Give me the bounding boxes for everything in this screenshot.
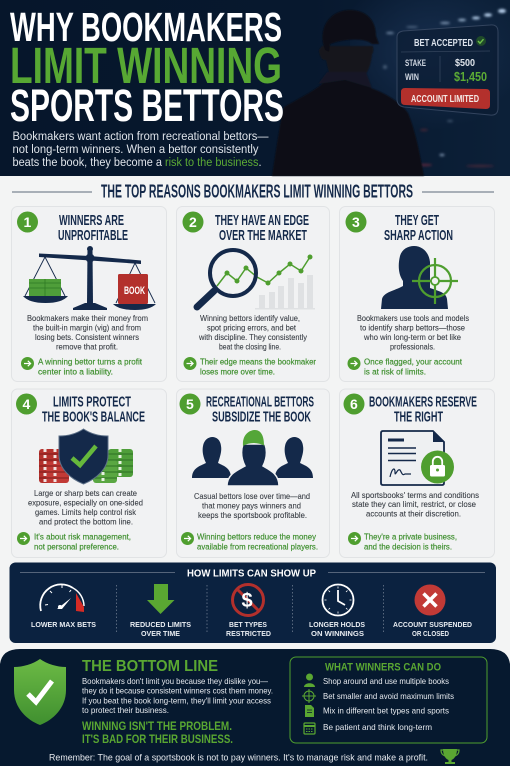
item: reduced limits: OVER TIME xyxy=(141,629,180,638)
icon: magnifier over chart xyxy=(197,250,315,310)
item: account suspended: OR CLOSED xyxy=(412,629,449,638)
bet slip panel: $500 xyxy=(455,57,475,69)
item: bet types restricted: RESTRICTED xyxy=(226,629,271,638)
heading 6 xyxy=(369,394,477,426)
body text 1: the built-in margin (vig) and from xyxy=(33,322,141,332)
takeaway 6: and the decision is theirs. xyxy=(364,542,452,552)
bottom line callout xyxy=(82,719,233,746)
body text 4: exposure, especially on one-sided xyxy=(28,498,143,508)
intro paragraph: not long-term winners. When a bettor consistently xyxy=(12,142,259,156)
takeaway 3 xyxy=(348,356,463,376)
main title: SPORTS BETTORS xyxy=(10,80,284,131)
body text 1: remove that profit. xyxy=(56,342,118,352)
tip: bet smaller xyxy=(302,689,454,703)
icon: targeted silhouette xyxy=(381,246,458,309)
tip: shop around: Shop around and use multiple books xyxy=(323,677,449,686)
tip: be patient: Be patient and think long-term xyxy=(323,723,432,732)
panel: hero header xyxy=(0,0,510,176)
heading 2: OVER THE MARKET xyxy=(219,227,307,244)
panel: what winners can do: WHAT WINNERS CAN DO xyxy=(325,662,441,674)
heading 5: SUBSIDIZE THE BOOK xyxy=(212,408,311,426)
icon: trophy xyxy=(441,749,459,764)
badge 6 xyxy=(344,394,364,414)
heading 4: LIMITS PROTECT xyxy=(53,394,131,410)
body text 3: who win long-term or bet like xyxy=(363,332,461,342)
panel: how limits can show up xyxy=(10,562,496,643)
panel: bottom line xyxy=(0,649,510,766)
body text 4: and protect the bottom line. xyxy=(39,516,133,526)
badge 5: 5 xyxy=(186,396,194,412)
bet slip panel: $1,450 xyxy=(454,69,487,84)
intro paragraph: Bookmakers want action from recreational bettors— xyxy=(12,129,269,143)
takeaway 6 xyxy=(348,532,457,552)
body text 6: All sportsbooks' terms and conditions xyxy=(351,490,479,500)
takeaway 3: is at risk of limits. xyxy=(364,366,426,376)
bottom line heading: THE BOTTOM LINE xyxy=(82,658,218,675)
body text 5: keeps the sportsbook profitable. xyxy=(198,510,307,520)
body text 4 xyxy=(28,488,143,526)
icon: contract with lock xyxy=(381,431,454,485)
icon: shield with chips xyxy=(39,429,133,484)
panel: reason 5 xyxy=(176,389,330,558)
body text 3: Bookmakers use tools and models xyxy=(357,313,469,323)
item: account suspended: ACCOUNT SUSPENDED xyxy=(393,620,472,629)
heading 1: UNPROFITABLE xyxy=(58,227,128,244)
body text 6 xyxy=(351,490,479,518)
badge 2: 2 xyxy=(189,214,197,230)
badge 1 xyxy=(17,212,38,232)
bet slip panel: STAKE xyxy=(405,58,426,69)
closing remark: Remember: The goal of a sportsbook is not to pay winners. It's to manage risk and make a profit. xyxy=(49,752,428,764)
body text 2 xyxy=(198,313,308,352)
bottom line body: If you beat the book long-term, they'll limit your access xyxy=(82,696,271,706)
badge 4 xyxy=(16,394,37,414)
heading 5: RECREATIONAL BETTORS xyxy=(206,394,314,410)
heading 3: THEY GET xyxy=(395,212,439,229)
heading 4 xyxy=(42,394,145,426)
item: reduced limits: REDUCED LIMITS xyxy=(130,620,191,629)
band heading: HOW LIMITS CAN SHOW UP xyxy=(187,568,316,580)
body text 1: Bookmakers make their money from xyxy=(27,313,148,323)
item: bet types restricted: BET TYPES xyxy=(229,620,267,629)
panel: reason 4 xyxy=(12,389,166,558)
body text 6: state they can limit, restrict, or close xyxy=(352,499,476,509)
bottom line body: to protect their business. xyxy=(82,706,169,715)
icon: three bettors xyxy=(192,430,313,486)
body text 2: Winning bettors identify value, xyxy=(200,313,300,323)
badge 3: 3 xyxy=(352,214,360,230)
panel: reason 1 xyxy=(12,206,166,382)
tip: bet smaller: Bet smaller and avoid maximum limits xyxy=(323,692,454,701)
body text 4: Large or sharp bets can create xyxy=(34,488,137,498)
body text 4: games. Limits help control risk xyxy=(35,507,137,517)
tip: shop around xyxy=(304,674,449,687)
panel: reason 2 xyxy=(176,206,330,382)
body text 1: losing bets. Consistent winners xyxy=(35,332,139,342)
item: longer holds: LONGER HOLDS xyxy=(309,620,365,629)
tip: mix bets: Mix in different bet types and sports xyxy=(323,706,449,716)
heading 5 xyxy=(206,394,314,426)
body text 1 xyxy=(27,313,148,352)
bottom line body: Bookmakers don't limit you because they dislike you— xyxy=(82,677,269,686)
body text 3: professionals. xyxy=(390,342,435,352)
item: bet types restricted xyxy=(226,584,271,638)
takeaway 1 xyxy=(21,356,143,376)
heading 1 xyxy=(58,212,128,244)
badge 5 xyxy=(180,394,200,414)
heading 6: THE RIGHT xyxy=(394,408,443,426)
bottom line body xyxy=(82,677,273,715)
takeaway 2 xyxy=(184,356,316,376)
heading 2 xyxy=(215,212,309,244)
body text 2: beat the closing line. xyxy=(219,342,281,352)
item: longer holds: ON WINNINGS xyxy=(311,629,364,638)
bottom line body: they do it because consistent winners cost them money. xyxy=(82,686,273,696)
tip: mix bets xyxy=(305,705,449,717)
stadium lights xyxy=(383,9,506,167)
main title xyxy=(10,4,284,131)
takeaway 1: A winning bettor turns a profit xyxy=(38,356,143,366)
takeaway 4 xyxy=(17,532,131,552)
badge 1: 1 xyxy=(24,214,32,230)
item: account suspended xyxy=(393,584,472,638)
takeaway 4: not personal preference. xyxy=(34,542,119,552)
heading 2: THEY HAVE AN EDGE xyxy=(215,212,309,229)
badge 6: 6 xyxy=(350,396,358,412)
takeaway 2: Their edge means the bookmaker xyxy=(200,356,316,366)
item: lower max bets: LOWER MAX BETS xyxy=(31,620,96,629)
bet slip panel: ACCOUNT LIMITED xyxy=(411,93,479,105)
takeaway 3: Once flagged, your account xyxy=(364,356,463,366)
item: bet types restricted: $ xyxy=(242,590,253,612)
badge 3 xyxy=(346,212,366,232)
takeaway 5: Winning bettors reduce the money xyxy=(197,532,317,542)
panel: reason 6 xyxy=(340,389,494,558)
body text 5: Casual bettors lose over time—and xyxy=(194,491,310,501)
body text 2: with discipline. They consistently xyxy=(198,332,308,342)
heading 3: SHARP ACTION xyxy=(384,227,453,244)
body text 2: spot pricing errors, and bet xyxy=(207,322,297,332)
takeaway 5 xyxy=(181,532,318,552)
item: reduced limits xyxy=(130,584,191,638)
bottom line callout: WINNING ISN'T THE PROBLEM. xyxy=(82,719,232,733)
main title: LIMIT WINNING xyxy=(10,37,282,94)
badge 4: 4 xyxy=(22,396,30,412)
body text 5 xyxy=(194,491,310,520)
takeaway 6: They're a private business, xyxy=(364,532,457,542)
heading 4: THE BOOK'S BALANCE xyxy=(42,408,145,426)
takeaway 5: available from recreational players. xyxy=(197,542,318,552)
bet slip panel xyxy=(397,25,498,115)
takeaway 4: It's about risk management, xyxy=(34,532,131,542)
item: longer holds xyxy=(309,584,365,638)
tip: be patient xyxy=(304,723,432,734)
badge 2 xyxy=(182,212,204,232)
takeaway 2: loses more over time. xyxy=(200,366,275,376)
panel: what winners can do xyxy=(290,657,487,743)
icon: balance scale xyxy=(23,246,156,310)
intro paragraph xyxy=(12,129,269,169)
body text 5: that money pays winners and xyxy=(202,500,301,510)
panel: reason 3 xyxy=(340,206,494,382)
icon: balance scale: BOOK xyxy=(124,285,145,297)
body text 3: to identify sharp bettors—those xyxy=(360,322,465,332)
bet slip panel: BET ACCEPTED xyxy=(414,37,473,49)
person silhouette from behind xyxy=(272,10,424,176)
item: lower max bets xyxy=(31,584,96,629)
main title: WHY BOOKMAKERS xyxy=(10,4,282,50)
bottom line callout: IT'S BAD FOR THEIR BUSINESS. xyxy=(82,732,233,746)
heading 3 xyxy=(384,212,453,244)
body text 3 xyxy=(357,313,469,352)
heading 1: WINNERS ARE xyxy=(59,212,124,229)
icon: green shield xyxy=(14,659,66,725)
takeaway 1: center into a liability. xyxy=(38,366,113,376)
body text 6: accounts at their discretion. xyxy=(366,508,461,518)
intro paragraph: beats the book, they become a risk to the business. xyxy=(12,155,262,169)
bet slip panel: WIN xyxy=(405,72,419,83)
